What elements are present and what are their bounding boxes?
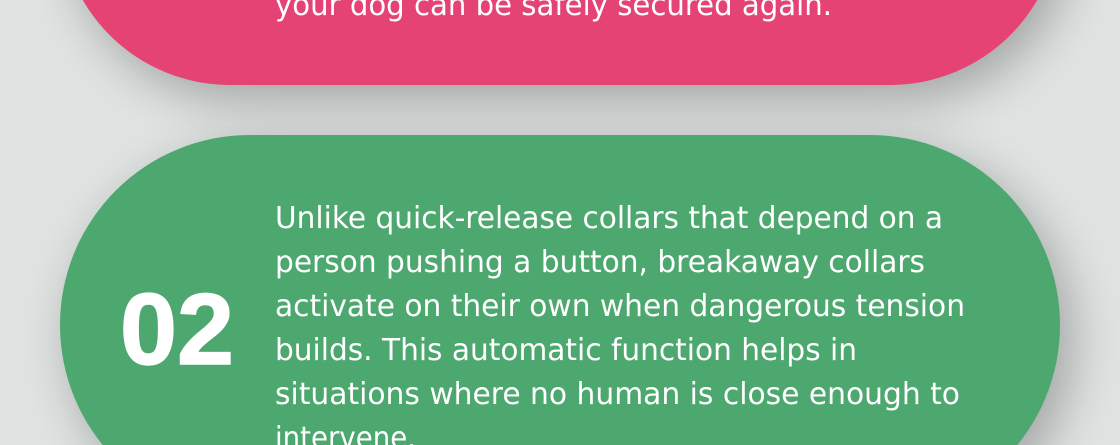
text: green panel body: Unlike quick-release collars that depend on a	[275, 201, 943, 236]
panel: green pill	[60, 135, 1060, 445]
text: green panel body: activate on their own when dangerous tension	[275, 289, 965, 324]
text: green panel body: builds. This automatic function helps in	[275, 333, 857, 368]
text: green panel body: situations where no human is close enough to	[275, 377, 960, 412]
number: 02: 02	[120, 274, 234, 386]
panel: pink pill	[60, 0, 1060, 85]
text: green panel body	[275, 201, 965, 445]
text: green panel body: person pushing a button, breakaway collars	[275, 245, 925, 280]
